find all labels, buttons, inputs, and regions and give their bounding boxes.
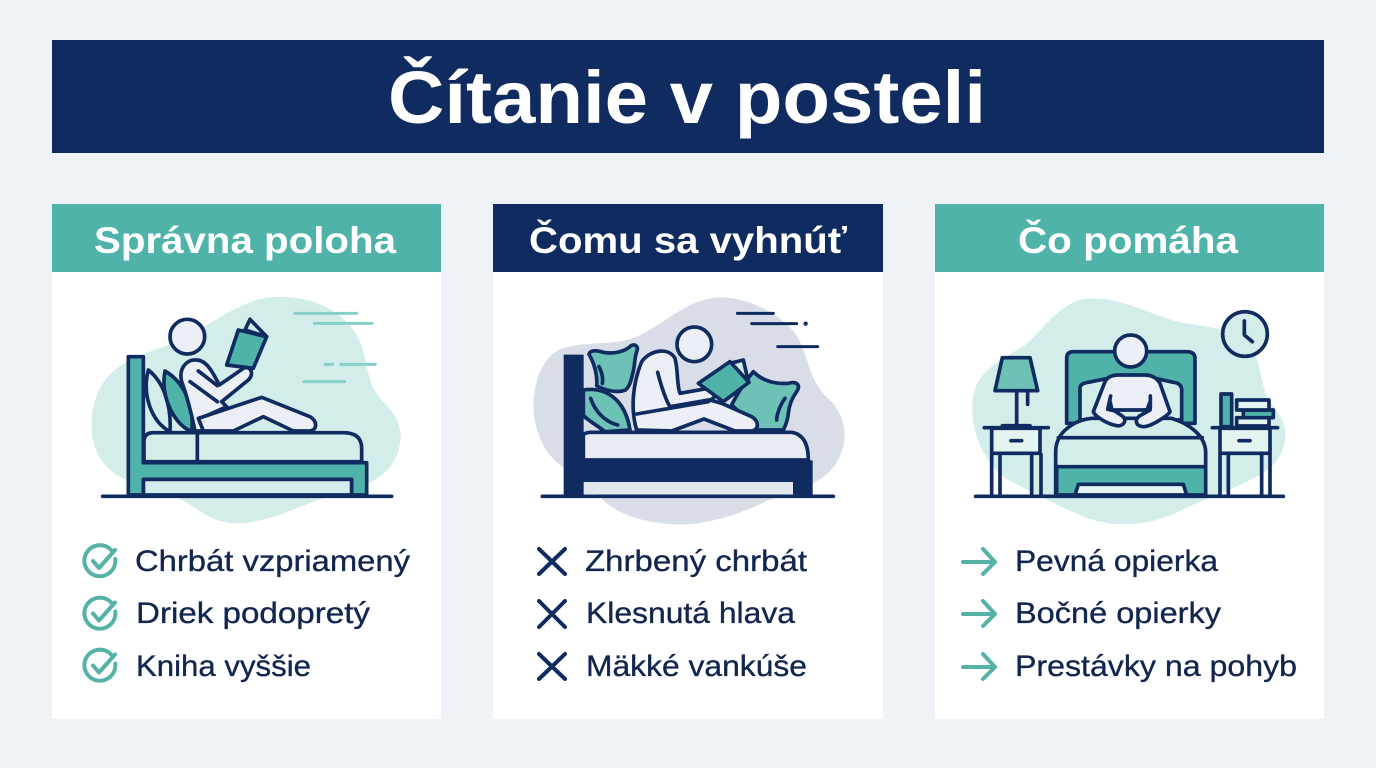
item: driek podopretý: Driek podopretý <box>136 597 370 630</box>
panel heading: správna poloha: Správna poloha <box>94 220 396 261</box>
title banner <box>52 40 1324 153</box>
illustration: supported reading setup in bedroom <box>972 298 1286 524</box>
panel heading: čo pomáha <box>935 204 1324 272</box>
title banner: Čítanie v posteli <box>388 56 986 139</box>
illustration: slouched reading posture in bed <box>534 297 844 524</box>
icon: lamp <box>995 358 1038 426</box>
checklist: correct posture <box>84 545 410 683</box>
item: pevná opierka: Pevná opierka <box>1015 545 1218 578</box>
panel heading: správna poloha <box>52 204 441 272</box>
item: kniha vyššie: Kniha vyššie <box>136 650 311 683</box>
item: zhrbený chrbát: Zhrbený chrbát <box>585 545 808 578</box>
panel: správna poloha <box>52 204 441 719</box>
item: klesnutá hlava: Klesnutá hlava <box>586 597 795 630</box>
list: what helps <box>963 545 1297 683</box>
list: what to avoid <box>539 545 808 683</box>
panel: čomu sa vyhnúť <box>493 204 883 719</box>
bed with seated person <box>1056 335 1206 495</box>
panel heading: čomu sa vyhnúť <box>493 204 883 272</box>
item: prestávky na pohyb: Prestávky na pohyb <box>1015 650 1297 683</box>
illustration: correct reading posture in bed <box>92 296 401 524</box>
item: chrbát vzpriamený: Chrbát vzpriamený <box>135 545 410 578</box>
panel heading: čomu sa vyhnúť: Čomu sa vyhnúť <box>529 219 847 261</box>
icon: clock <box>1223 312 1267 356</box>
item: bočné opierky: Bočné opierky <box>1015 597 1221 630</box>
right nightstand with books <box>1212 394 1278 495</box>
left nightstand <box>984 428 1048 495</box>
item: mäkké vankúše: Mäkké vankúše <box>586 650 807 683</box>
panel: čo pomáha <box>935 204 1324 719</box>
panel heading: čo pomáha: Čo pomáha <box>1018 219 1238 261</box>
